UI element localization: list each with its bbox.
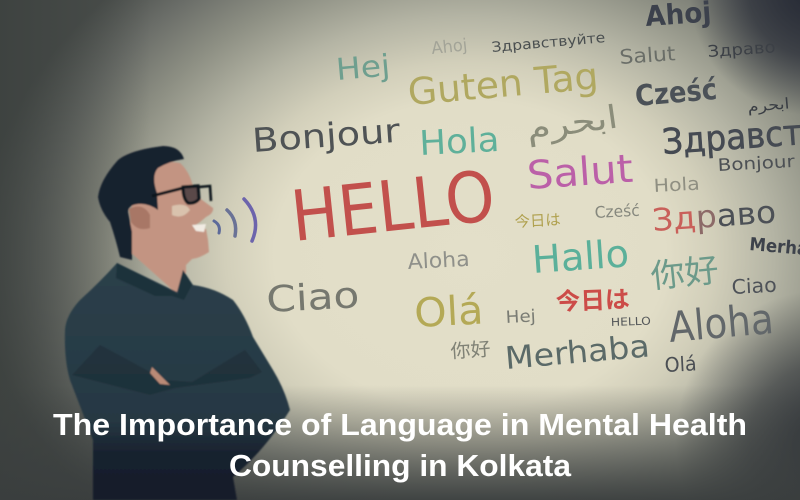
word: Aloha small: Aloha xyxy=(407,247,470,274)
face highlight xyxy=(172,205,190,217)
word: Hej teal: Hej xyxy=(335,48,391,88)
word: HELLO main: HELLO xyxy=(287,155,499,258)
word: Zdravo small: Здраво xyxy=(707,37,776,61)
word: Nihao small: 你好 xyxy=(450,334,491,364)
word: HELLO small: HELLO xyxy=(611,315,651,329)
word: Czesc small: Cześć xyxy=(594,201,640,222)
word: Salut grey: Salut xyxy=(619,41,676,69)
word: Zdravo red: Здраво xyxy=(651,194,777,239)
neck and face xyxy=(128,162,213,294)
word: Konnichiwa red: 今日は xyxy=(555,279,630,317)
word: Aloha large: Aloha xyxy=(667,294,775,352)
hand sliver xyxy=(150,367,170,385)
word: Merhaba large: Merhaba xyxy=(504,328,651,377)
crossed arm shadow xyxy=(72,345,262,395)
word wall of greetings xyxy=(251,0,800,377)
word: Salut magenta: Salut xyxy=(526,147,634,199)
open mouth xyxy=(192,224,206,232)
word: Ola small: Olá xyxy=(664,351,697,377)
word: Arabic greeting small: ابحرم xyxy=(747,94,790,116)
glasses xyxy=(152,186,211,203)
word: Ciao large: Ciao xyxy=(265,275,360,321)
title xyxy=(53,407,747,483)
word: Bonjour small: Bonjour xyxy=(717,152,795,176)
word: Hola small: Hola xyxy=(653,174,700,197)
word: Zdravstvuyte: Здравствуйте xyxy=(491,30,606,56)
word: Hola teal: Hola xyxy=(418,120,500,164)
title line 1: The Importance of Language in Mental Health xyxy=(53,407,747,442)
word: Ola gold: Olá xyxy=(413,287,484,337)
word: Ahoj small: Ahoj xyxy=(430,35,468,59)
word: Hej small: Hej xyxy=(505,306,536,328)
hair xyxy=(98,146,184,260)
title line 2: Counselling in Kolkata xyxy=(229,448,572,483)
word: Arabic greeting: ابحرم xyxy=(524,97,620,148)
word: Ciao small: Ciao xyxy=(731,273,777,299)
word: Czesc dark: Cześć xyxy=(634,72,718,113)
word: Nihao teal: 你好 xyxy=(648,243,721,298)
word: Konnichiwa small: 今日は xyxy=(514,211,561,231)
icon: sound waves from mouth xyxy=(214,199,256,241)
shirt xyxy=(65,263,290,500)
man in profile xyxy=(65,146,290,500)
collar and placket xyxy=(116,263,192,300)
word: Bonjour large: Bonjour xyxy=(251,111,402,160)
word: Hallo teal: Hallo xyxy=(531,231,630,282)
ear xyxy=(129,207,150,229)
word: Guten Tag: Guten Tag xyxy=(406,54,600,114)
